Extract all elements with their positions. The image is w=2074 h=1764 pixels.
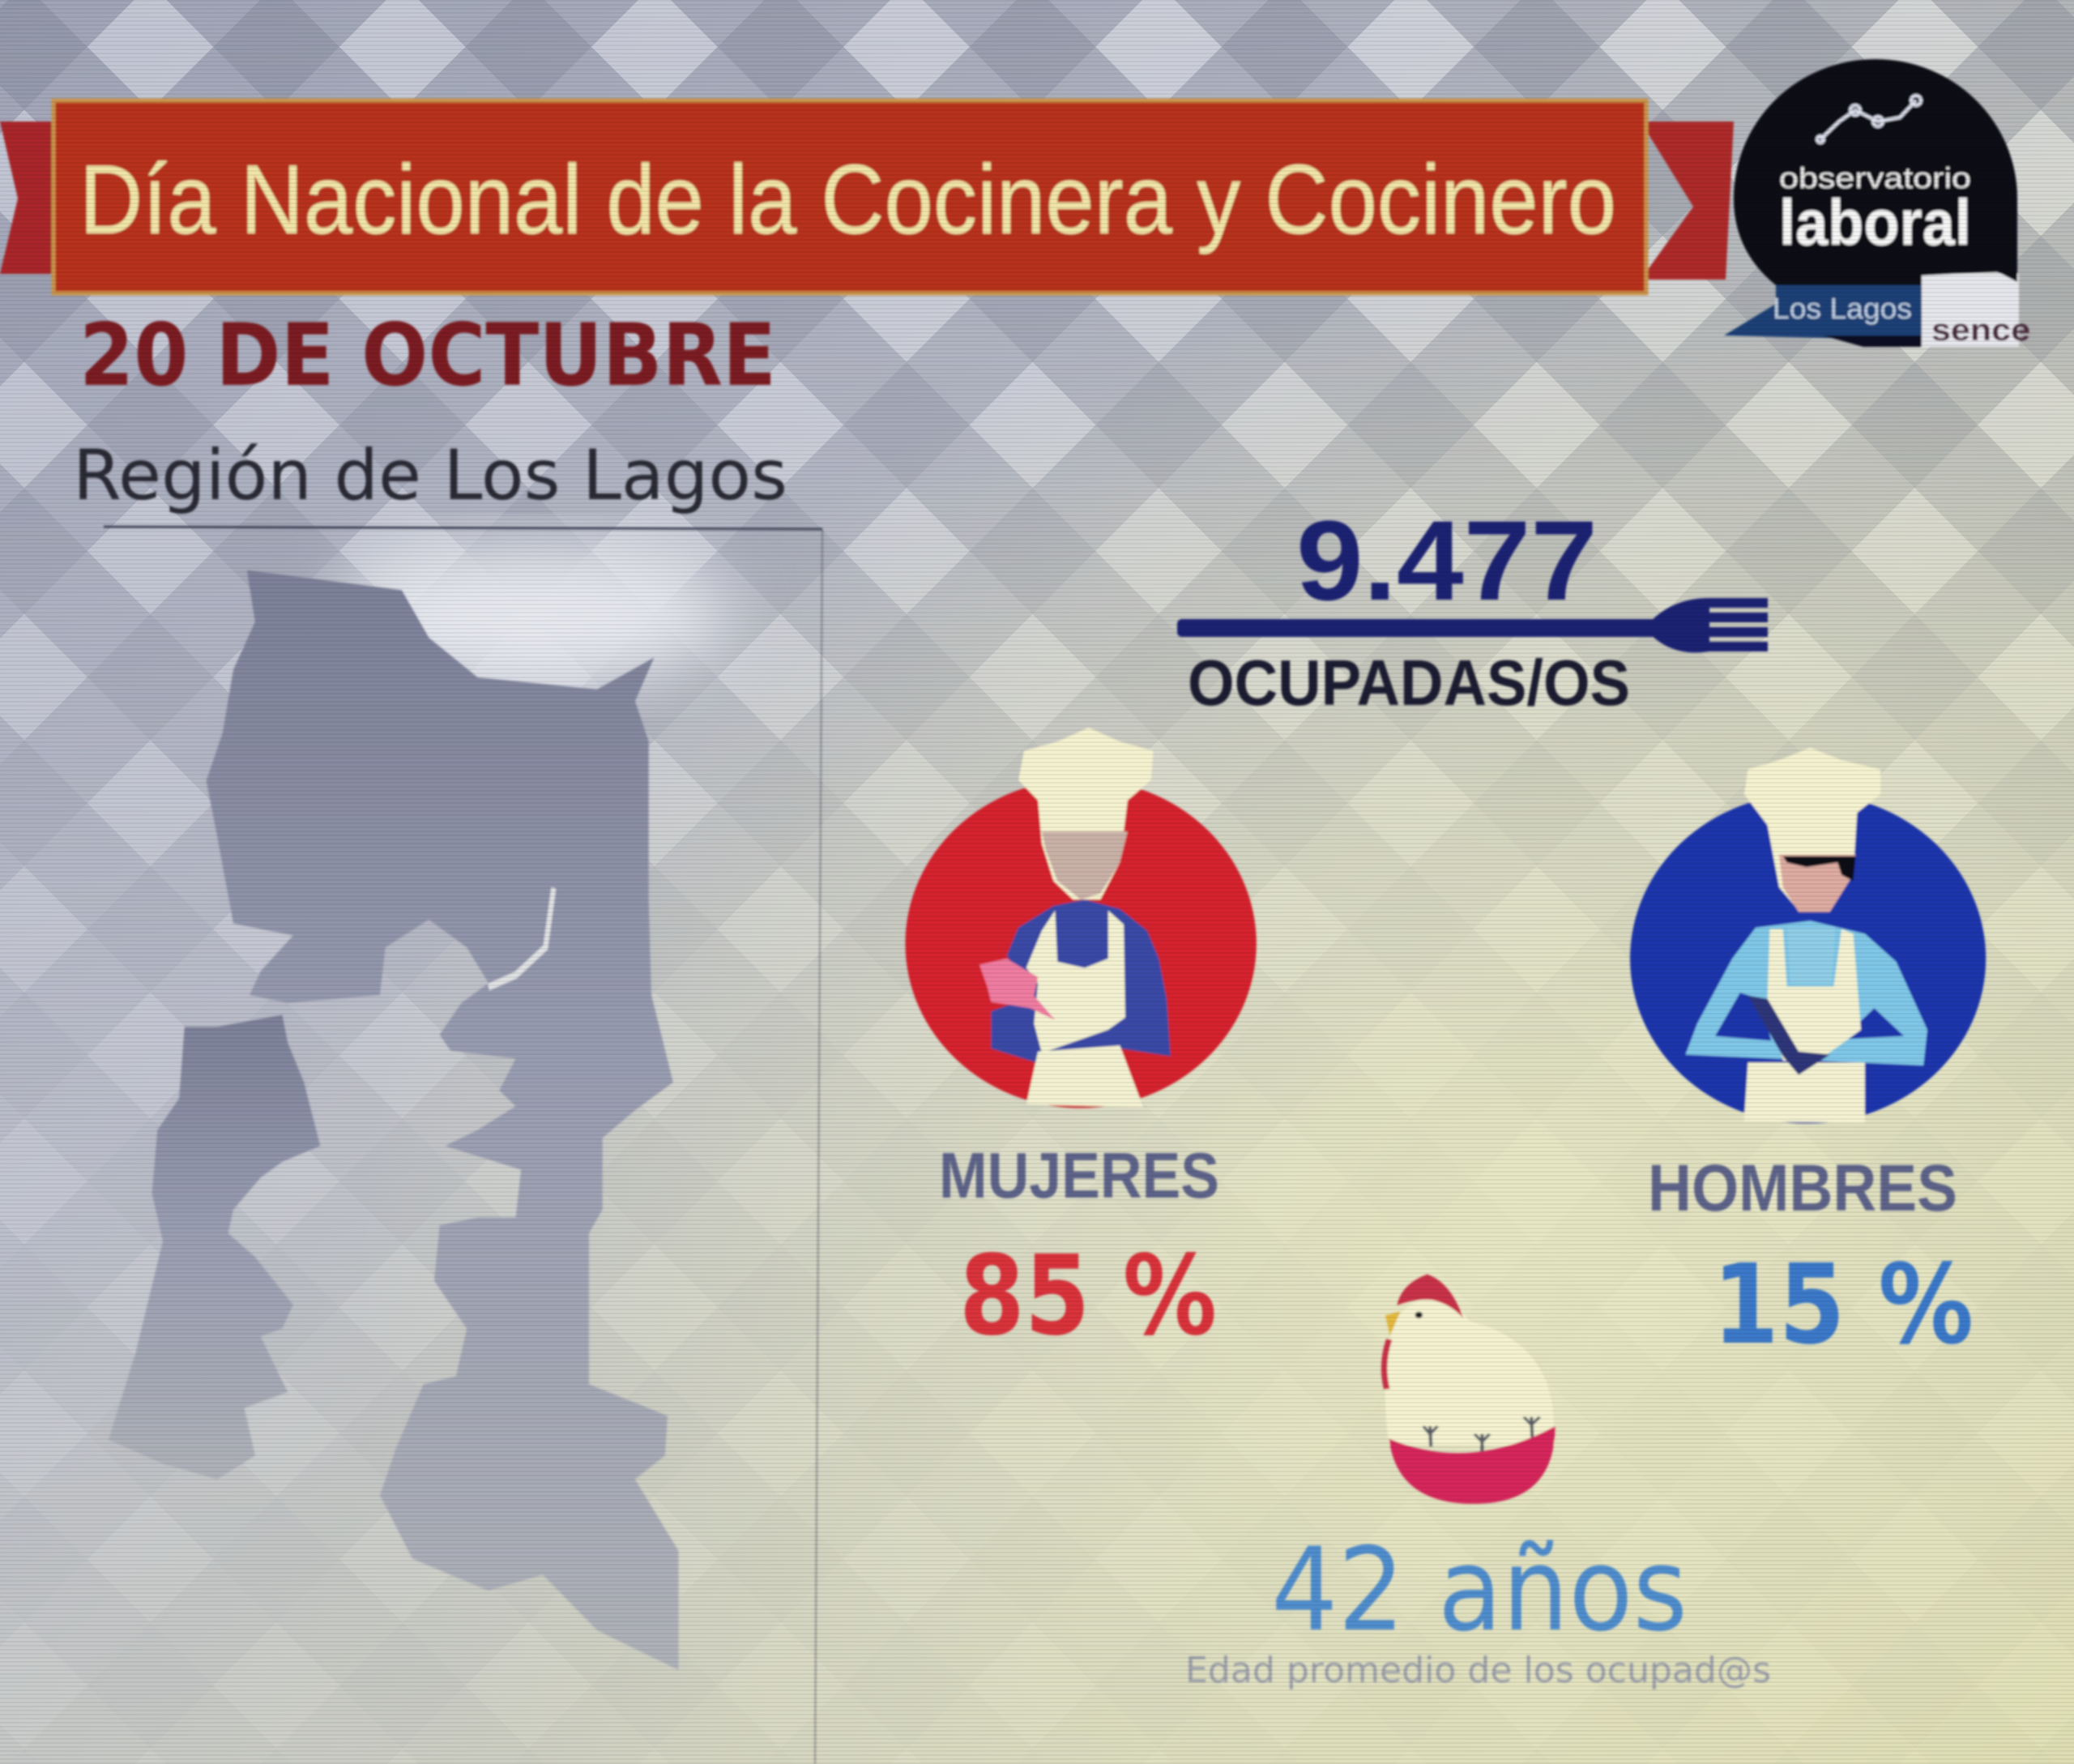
man inner left arm gap [1715, 993, 1771, 1040]
hen beak [1385, 1312, 1400, 1335]
woman red circle [905, 779, 1257, 1108]
date heading: 20 DE OCTUBRE [79, 305, 776, 405]
logo text: sence: sence [1931, 314, 2030, 348]
ribbon left tail [0, 122, 57, 274]
logo black badge [1734, 59, 2017, 285]
woman face [1042, 831, 1128, 899]
man hair [1783, 856, 1855, 881]
map: Chiloé island [109, 1014, 320, 1480]
icon: woman chef [905, 728, 1257, 1108]
logo line graph [1817, 96, 1921, 143]
woman body [991, 899, 1171, 1066]
man blue circle [1630, 793, 1986, 1124]
frame line around map [104, 527, 822, 1764]
label: men [1648, 1151, 1974, 1369]
HOMBRES: HOMBRES [1648, 1151, 1957, 1225]
85 %: 85 % [959, 1232, 1217, 1360]
stat: employed people [1177, 497, 1768, 719]
woman apron [1026, 911, 1125, 1053]
woman pink item [979, 959, 1055, 1020]
caption: Edad promedio de los ocupad@s [1185, 1650, 1771, 1691]
man apron [1768, 929, 1861, 1061]
label: women [939, 1139, 1219, 1360]
15 %: 15 % [1713, 1241, 1974, 1369]
man bib [1787, 928, 1835, 984]
ribbon main band [53, 100, 1646, 293]
label OCUPADAS/OS: OCUPADAS/OS [1188, 647, 1630, 719]
logo text: laboral: laboral [1779, 186, 1971, 258]
title: Día Nacional de la Cocinera y Cocinero [79, 144, 1616, 254]
man hat and head cut-out [1744, 748, 1880, 911]
42 años: 42 años [1271, 1523, 1688, 1657]
icon: man chef [1630, 748, 1986, 1124]
man face [1779, 855, 1855, 912]
number 9.477: 9.477 [1296, 497, 1598, 624]
logo text: observatorio: observatorio [1779, 161, 1971, 194]
logo white tab [1920, 274, 2019, 347]
logo ribbon [1724, 285, 1922, 340]
hen eye [1415, 1312, 1423, 1318]
region heading: Región de Los Lagos [73, 435, 787, 516]
hen feet [1423, 1417, 1540, 1458]
ribbon right tail [1641, 122, 1734, 280]
hen bowl [1389, 1426, 1555, 1504]
banner ribbon [0, 100, 1734, 293]
man body [1685, 920, 1927, 1066]
icon: fork divider [1177, 598, 1768, 652]
woman lower body [1026, 1045, 1143, 1108]
MUJERES: MUJERES [939, 1139, 1219, 1211]
map: Región de Los Lagos [109, 570, 679, 1670]
woman hat and head cut-out [1018, 728, 1154, 899]
man lower body [1744, 1062, 1865, 1123]
map: estuary inlet [489, 888, 553, 987]
man knife [1748, 996, 1830, 1074]
stat: average age [1185, 1523, 1771, 1691]
hen body [1385, 1299, 1555, 1445]
hen neck line [1385, 1339, 1389, 1389]
map mainland [207, 570, 679, 1670]
logo: observatorio laboral Los Lagos [1724, 59, 2030, 348]
man inner right arm gap [1841, 1008, 1904, 1039]
icon: hen in bowl [1385, 1275, 1555, 1504]
hen comb [1397, 1275, 1463, 1318]
logo text: Los Lagos: Los Lagos [1773, 292, 1912, 325]
